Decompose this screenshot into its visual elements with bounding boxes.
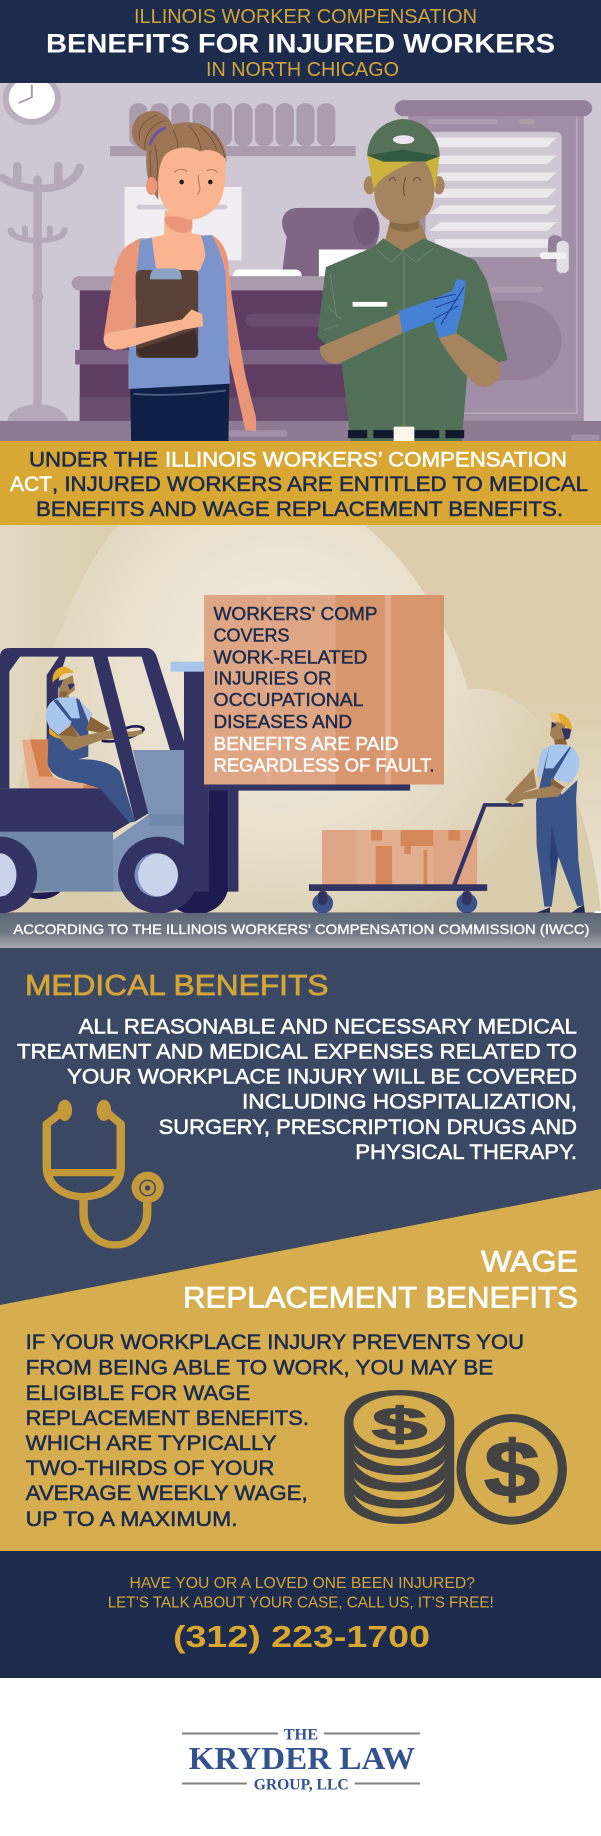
wage text: UP TO A MAXIMUM. <box>26 1508 238 1531</box>
cta text: LET’S TALK ABOUT YOUR CASE, CALL US, IT’S FREE! <box>108 1594 494 1611</box>
forklift mast and rear wheels <box>23 662 410 914</box>
phone number: (312) 223-1700 <box>173 1619 430 1654</box>
wage text: TWO-THIRDS OF YOUR <box>26 1457 274 1480</box>
logo: The Kryder Law Group <box>182 1726 420 1794</box>
intro text: ILLINOIS WORKERS’ COMPENSATION <box>165 448 567 472</box>
illustration: warehouse forklift scene <box>0 525 601 914</box>
cta text <box>108 1575 494 1611</box>
icon: coins with dollar signs <box>344 1390 562 1524</box>
callout text <box>214 603 434 775</box>
background arches <box>8 525 601 913</box>
worker pushing cart <box>505 713 585 913</box>
callout text: OCCUPATIONAL <box>214 689 364 710</box>
logo: The Kryder Law Group: KRYDER LAW <box>189 1740 415 1776</box>
forklift body and wheels <box>0 813 209 913</box>
wage text: ELIGIBLE FOR WAGE <box>26 1382 250 1405</box>
logo: The Kryder Law Group: GROUP, LLC <box>254 1776 349 1794</box>
icon: stethoscope <box>47 1100 164 1245</box>
intro text: , INJURED WORKERS ARE ENTITLED TO MEDICAL <box>52 473 588 496</box>
medical benefits text: ALL REASONABLE AND NECESSARY MEDICAL <box>79 1015 577 1038</box>
callout text: BENEFITS ARE PAID <box>214 733 398 754</box>
dollar sign stack: $ <box>372 1398 427 1450</box>
floor <box>0 420 601 441</box>
wage text: REPLACEMENT BENEFITS. <box>26 1407 309 1430</box>
callout text: WORKERS' COMP <box>214 603 378 624</box>
source bar <box>0 913 601 948</box>
wage heading <box>183 1246 578 1315</box>
wage text: AVERAGE WEEKLY WAGE, <box>26 1482 308 1505</box>
logo: The Kryder Law Group: THE <box>284 1726 318 1744</box>
medical benefits text <box>17 1015 577 1164</box>
dollar sign coin: $ <box>484 1424 540 1513</box>
coat rack <box>2 166 80 421</box>
wage text: WHICH ARE TYPICALLY <box>26 1432 277 1455</box>
intro text: UNDER THE <box>29 448 158 472</box>
footer call to action <box>0 1551 601 1678</box>
door <box>395 100 592 423</box>
callout text: COVERS <box>214 625 290 646</box>
intro text <box>10 448 588 521</box>
header banner <box>0 0 601 83</box>
gold intro band <box>0 441 601 525</box>
callout text: INJURIES OR <box>214 668 332 689</box>
wall notice <box>125 187 241 260</box>
woman body with clipboard <box>103 237 256 443</box>
cart with boxes <box>0 805 594 914</box>
wage text: FROM BEING ABLE TO WORK, YOU MAY BE <box>26 1356 493 1379</box>
medical benefits heading: MEDICAL BENEFITS <box>25 970 328 1002</box>
icon: wall clock <box>2 83 61 125</box>
medical benefits text: PHYSICAL THERAPY. <box>355 1141 577 1164</box>
medical benefits text: TREATMENT AND MEDICAL EXPENSES RELATED TO <box>17 1040 577 1063</box>
callout box on forklift <box>204 595 444 784</box>
shelf with binders <box>110 103 356 156</box>
cash register <box>233 208 380 277</box>
counter <box>72 276 356 423</box>
intro text: BENEFITS AND WAGE REPLACEMENT BENEFITS. <box>36 498 563 521</box>
panel: wage replacement benefits <box>0 1189 601 1551</box>
callout text: REGARDLESS OF FAULT. <box>214 754 434 775</box>
forklift cab with driver <box>0 648 184 832</box>
illustration: office scene with two workers <box>0 72 601 445</box>
medical benefits text: SURGERY, PRESCRIPTION DRUGS AND <box>159 1116 577 1139</box>
callout text: WORK-RELATED <box>214 646 368 667</box>
woman head and shoulders <box>113 111 229 300</box>
intro text: ACT <box>10 473 52 496</box>
cta text: HAVE YOU OR A LOVED ONE BEEN INJURED? <box>130 1575 475 1592</box>
medical benefits text: YOUR WORKPLACE INJURY WILL BE COVERED <box>67 1065 577 1088</box>
wage text: IF YOUR WORKPLACE INJURY PREVENTS YOU <box>26 1331 524 1354</box>
callout text: DISEASES AND <box>214 711 352 732</box>
wage text <box>26 1331 524 1531</box>
source bar: ACCORDING TO THE ILLINOIS WORKERS' COMPENSATION COMMISSION (IWCC) <box>13 921 589 937</box>
wage heading: WAGE <box>481 1246 578 1279</box>
man in green uniform with blue gloves <box>317 119 508 442</box>
main title: BENEFITS FOR INJURED WORKERS <box>46 28 555 58</box>
panel: medical benefits <box>0 948 601 1308</box>
wage heading: REPLACEMENT BENEFITS <box>183 1282 578 1315</box>
medical benefits text: INCLUDING HOSPITALIZATION, <box>242 1090 577 1113</box>
title line 1: ILLINOIS WORKER COMPENSATION <box>134 6 477 28</box>
title line 3: IN NORTH CHICAGO <box>206 59 399 81</box>
